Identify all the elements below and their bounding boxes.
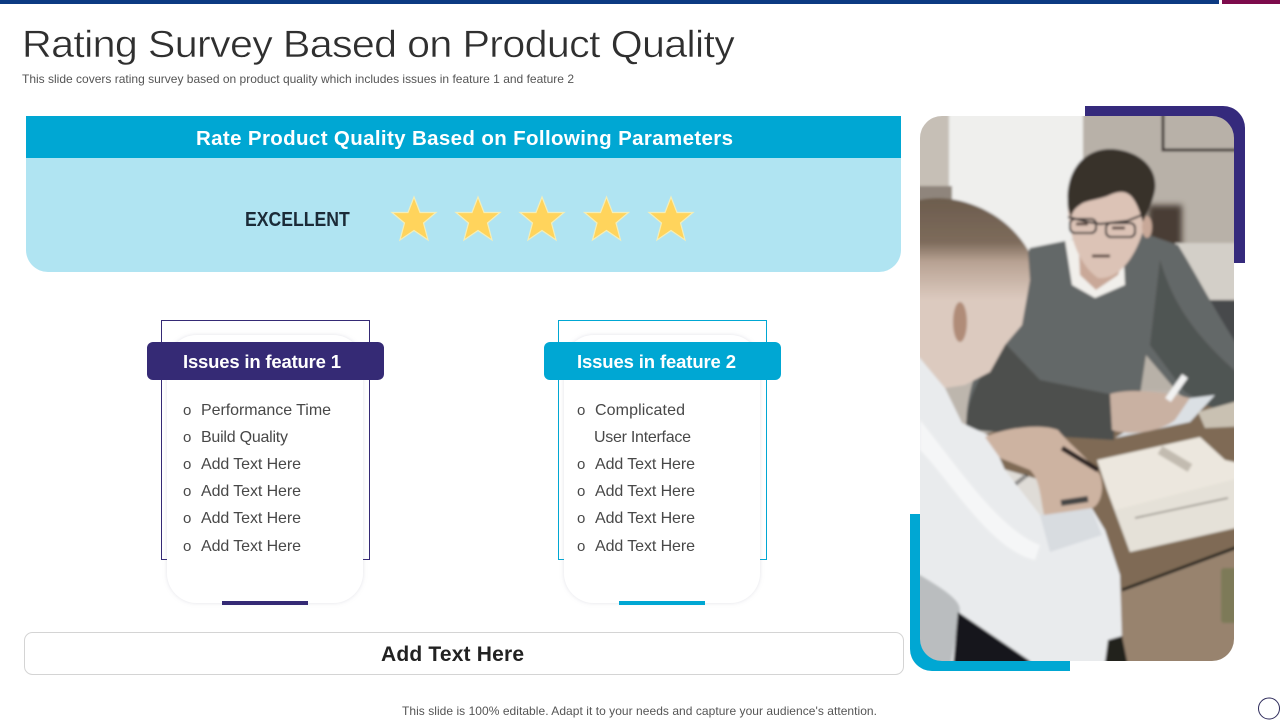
feature 2 list: o xyxy=(577,510,585,527)
photo: two men reviewing a book at a table xyxy=(920,116,1234,661)
decorative purple photo frame xyxy=(1085,106,1245,263)
feature 1 list: o xyxy=(183,538,191,555)
feature 2 list: Complicated xyxy=(595,402,685,419)
feature 1 list: Add Text Here xyxy=(201,510,301,527)
feature 2 list: o xyxy=(577,483,585,500)
back man eyes and mouth xyxy=(1076,224,1125,256)
feature 2 list: Add Text Here xyxy=(595,456,695,473)
front man neck and face xyxy=(920,197,1032,388)
feature 2 list: o xyxy=(577,538,585,555)
top accent bar xyxy=(0,0,1280,4)
feature 1 list: o xyxy=(183,510,191,527)
table xyxy=(985,404,1234,595)
bottom text box xyxy=(24,632,904,674)
feature 1 list: Performance Time xyxy=(201,402,331,419)
panel: issues in feature 1 xyxy=(147,320,384,605)
open book xyxy=(1096,435,1234,538)
back man ear xyxy=(1142,216,1152,238)
feature 2 list: o xyxy=(577,402,585,419)
back man hand with pen xyxy=(1110,391,1190,433)
notebook xyxy=(1004,468,1046,516)
back man hair xyxy=(1068,149,1155,222)
feature 1 list: o xyxy=(183,456,191,473)
panel heading: Rate Product Quality Based on Following Parameters xyxy=(196,127,733,150)
rating label: EXCELLENT xyxy=(245,209,350,231)
decorative teal photo frame xyxy=(910,514,1070,671)
front man dark trousers xyxy=(952,611,1032,661)
feature 1 header xyxy=(147,342,384,380)
bottom text box: Add Text Here xyxy=(381,643,524,666)
back man face xyxy=(1067,190,1144,279)
wrist watch xyxy=(1061,499,1088,503)
feature 1 list: o xyxy=(183,429,191,446)
feature 2 header xyxy=(544,342,781,380)
feature 1 list: o xyxy=(183,483,191,500)
feature 1 header: Issues in feature 1 xyxy=(183,351,341,372)
panel: rating parameters xyxy=(26,116,901,272)
back man collar and neck xyxy=(1065,240,1125,298)
panel: issues in feature 2 xyxy=(544,320,781,605)
feature 1 list xyxy=(183,402,331,555)
back man glasses xyxy=(1068,215,1142,237)
feature 2 list: Add Text Here xyxy=(595,538,695,555)
feature 2 header: Issues in feature 2 xyxy=(577,351,736,372)
feature 2 list: Add Text Here xyxy=(595,483,695,500)
footer note: This slide is 100% editable. Adapt it to your needs and capture your audience's attention. xyxy=(402,704,877,718)
title: Rating Survey Based on Product Quality xyxy=(22,23,735,66)
feature 2 list: User Interface xyxy=(594,429,691,446)
feature 2 list: o xyxy=(577,456,585,473)
feature 2 list: Add Text Here xyxy=(595,510,695,527)
back man sweater xyxy=(966,233,1234,432)
feature 1 list: Add Text Here xyxy=(201,538,301,555)
front man hands xyxy=(985,427,1102,515)
five star rating xyxy=(392,197,693,240)
feature 1 list: Add Text Here xyxy=(201,483,301,500)
right edge object xyxy=(1220,568,1234,624)
feature 1 list: o xyxy=(183,402,191,419)
feature 2 list xyxy=(577,402,695,555)
feature 1 list: Build Quality xyxy=(201,429,288,446)
front man shirt xyxy=(920,357,1124,661)
papers xyxy=(1115,395,1215,438)
walls xyxy=(944,380,1183,435)
subtitle: This slide covers rating survey based on product quality which includes issues in feature 1 and feature 2 xyxy=(22,72,574,86)
feature 1 list: Add Text Here xyxy=(201,456,301,473)
corner circle icon xyxy=(1258,698,1280,719)
